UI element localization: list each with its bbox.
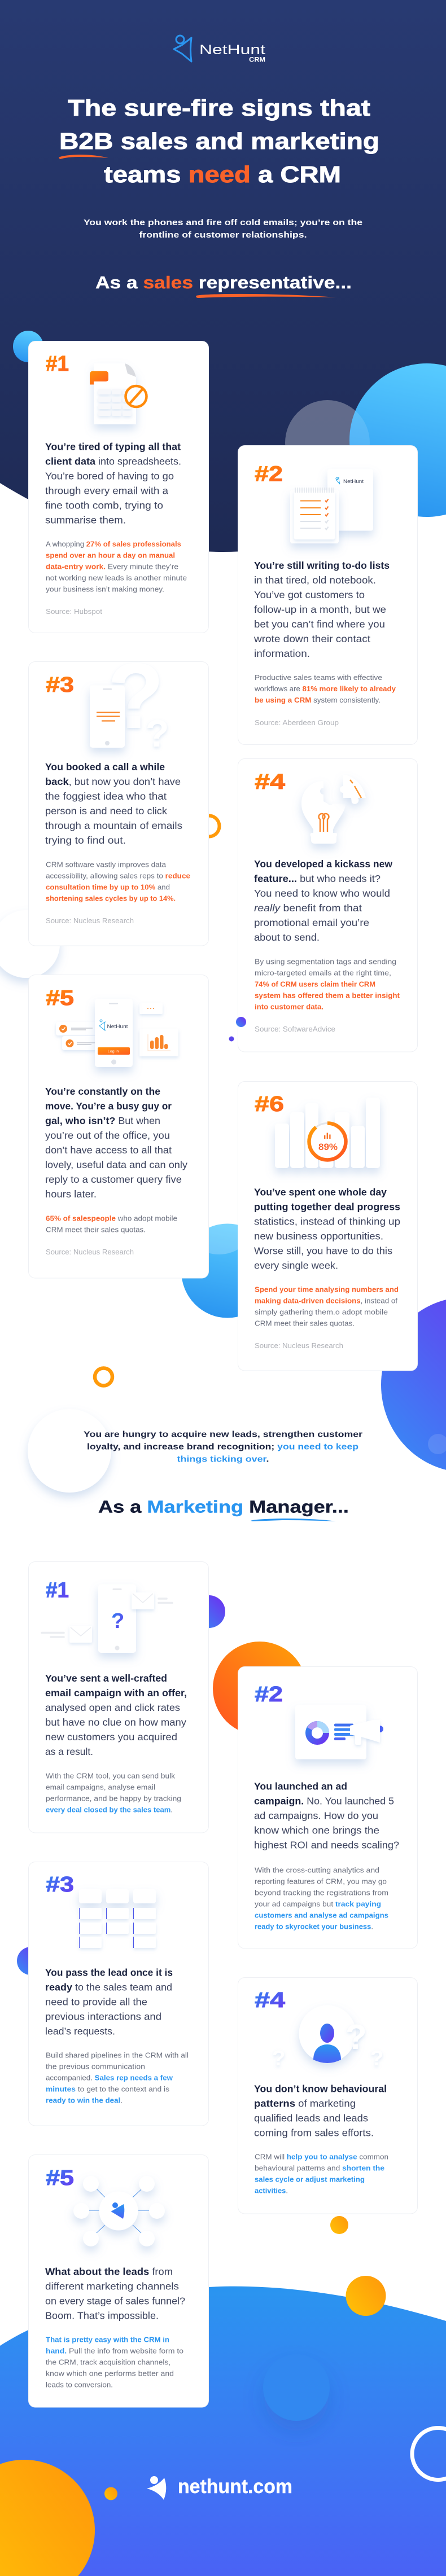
decoration: white shadow circle [0,910,60,978]
stat text: By using segmentation tags and sending [255,957,396,966]
card: sales sign 1 [28,341,209,633]
main text: You’ve sent a well-crafted [45,1673,167,1684]
decoration: sky blue blob top left [13,331,43,362]
source: Source: Hubspot [46,607,102,616]
main text: hours later. [45,1188,97,1200]
stat text: CRM meet their sales quotas. [46,1226,146,1234]
decoration: large sky blue blob right [349,363,446,517]
stat text: email campaigns, analyse email [46,1783,155,1791]
stat text: your business isn’t making money. [46,585,164,594]
icon: spreadsheet with prohibition sign [90,363,147,424]
decoration: purple half circle beside marketing card 1 [193,1595,225,1628]
subtitle [84,218,362,240]
main text: qualified leads and leads [254,2113,368,2124]
stat text: system has offered them a better insight [255,991,400,1000]
stat text: into customer data. [255,1002,323,1011]
main text: need to provide all the [45,1996,147,2008]
main text: every single week. [254,1260,338,1271]
logo: NetHunt CRM: NetHunt [199,42,265,58]
main text: move. You’re a busy guy or [45,1100,172,1112]
main text: don’t have access to all that [45,1144,172,1156]
stat text: CRM meet their sales quotas. [255,1319,355,1327]
number 1: #1 [46,1579,69,1603]
main text: as a result. [45,1746,93,1757]
main text: You’re constantly on the [45,1086,160,1097]
icon: person with question marks: ? [272,2047,285,2070]
decoration: small orange dot in footer [104,2487,117,2500]
main text: feature... but who needs it? [254,873,381,884]
main text: in that tired, old notebook. [254,574,376,586]
icon: phone with envelopes [42,1585,172,1653]
decoration: orange ring beside card 3 [199,816,219,836]
stat text [46,2335,183,2389]
source: Source: Aberdeen Group [255,718,339,727]
number 4: #4 [255,1989,285,2012]
main text [254,858,392,943]
main text: know which one brings the [254,1825,379,1836]
decoration: purple blob beside marketing card 3 [17,1947,45,1975]
decoration: translucent blob behind card 2 [285,400,370,486]
main text: person is and need to click [45,805,167,817]
stat text [46,860,190,903]
source: Source: Nucleus Research [255,1341,343,1350]
stat text: CRM will help you to analyse common [255,2152,388,2161]
main text: through every email with a [45,485,168,497]
stat text: consultation time by up to 10% and [46,883,170,892]
title: The sure-fire signs that [68,95,370,121]
stat text: leads to conversion. [46,2380,113,2389]
icon: person with question marks [272,2005,383,2070]
stat text [46,1214,177,1234]
decoration: orange ring [95,1368,112,1386]
main text: information. [254,648,310,659]
main text [45,1086,187,1200]
footer logo: nethunt.com [147,2476,292,2500]
card: marketing sign 2 [238,1667,418,1949]
main text [254,1186,400,1271]
intro text: marketing: You are hungry to acquire new leads, strengthen customer [84,1430,362,1439]
stat text [255,2152,388,2195]
stat text: data-entry work. Every minute they’re [46,562,178,571]
icon: phone with envelopes: ? [111,1609,124,1633]
source: Source: SoftwareAdvice [255,1025,335,1033]
main text: patterns of marketing [254,2098,356,2109]
stat text [46,2051,189,2105]
stat text: CRM software vastly improves data [46,860,167,869]
main text: What about the leads from [45,2266,173,2277]
main text: different marketing channels [45,2281,179,2292]
stat text: minutes to get to the context and is [46,2085,170,2094]
main text: You’ve got customers to [254,589,365,600]
main text: coming from sales efforts. [254,2127,374,2139]
stat text: be using a CRM system consistently. [255,696,381,704]
title [59,95,379,187]
stat text: reporting features of CRM, you may go [255,1877,387,1886]
main text: bet you can’t find where you [254,618,385,630]
number 3: #3 [46,1873,74,1897]
stat text: 74% of CRM users claim their CRM [255,980,375,989]
decoration: big orange circle bottom left [0,2460,95,2576]
main text: You pass the lead once it is [45,1967,173,1978]
stat text: simply gathering them.o adopt mobile [255,1308,388,1316]
main text: ready to the sales team and [45,1982,172,1993]
main text: you’re out of the office, you [45,1130,170,1141]
number 6: #6 [255,1092,284,1116]
decoration: faded blue circle in footer [263,2354,330,2421]
intro text: marketing: loyalty, and increase brand recognition; you need to keep [87,1442,358,1451]
main text: putting together deal progress [254,1201,400,1212]
number 5: #5 [46,986,74,1010]
stat text: the previous communication [46,2062,145,2071]
stat text: accessibility, allowing sales reps to reduce [46,871,190,880]
main text: gal, who isn’t? But when [45,1115,160,1126]
icon: bar chart with 89% ring [275,1098,380,1168]
main text: promotional email you’re [254,917,369,928]
stat text: behavioural patterns and shorten the [255,2164,384,2173]
decoration: white ring in footer [412,2428,446,2480]
main text: fine tooth comb, trying to [45,500,163,511]
logo: NetHunt CRM: CRM [249,56,265,63]
main text: analysed open and click rates [45,1702,180,1713]
stat text: beyond tracking the registrations from [255,1888,388,1897]
decoration: purple dot small [229,1036,234,1042]
heading: as a marketing manager: As a Marketing Manager... [98,1497,349,1517]
main text [45,2266,185,2322]
stat text: making data-driven decisions , instead of [255,1297,397,1305]
main text: statistics, instead of thinking up [254,1215,400,1227]
main text [253,560,390,659]
main text: wrote down their contact [253,633,370,644]
main text: previous interactions and [45,2011,161,2022]
stat text: not working new leads is another minute [46,573,187,582]
decoration: purple blob right [381,1297,446,1472]
decoration: yellow orange circle on wave [346,2276,386,2316]
main text: You need to know who would [254,888,390,899]
intro text: marketing: things ticking over . [177,1455,269,1464]
main text: client data into spreadsheets. [45,456,181,467]
card: marketing sign 5 [28,2154,209,2407]
main text: You launched an ad [254,1781,347,1792]
stat text: activities. [255,2186,288,2195]
stat text [46,1772,181,1814]
stat text: every deal closed by the sales team. [46,1806,173,1814]
stat text: Spend your time analysing numbers and [255,1285,399,1293]
source: Source: Nucleus Research [46,1248,134,1256]
stat text: ready to skyrocket your business. [255,1922,373,1931]
main text: highest ROI and needs scaling? [254,1840,399,1851]
main text: Worse still, you have to do this [254,1245,392,1256]
background: dark header panel [0,0,446,552]
background: footer blue wave [0,2287,446,2576]
icon: hub with satellites [73,2176,165,2246]
main text: You’re bored of having to go [45,471,174,482]
card: sales sign 5 [28,975,209,1278]
icon: analytics card with megaphone [295,1705,383,1759]
main text: the foggiest idea who that [45,791,167,802]
main text [45,441,181,526]
main text [45,1967,173,2037]
number 2: #2 [255,1683,283,1706]
main text: but have no clue on how many [45,1717,186,1728]
main text: campaign. No. You launched 5 [254,1796,394,1807]
main text: new customers you acquired [45,1731,177,1743]
stat text: ready to win the deal . [46,2096,123,2105]
stat text: performance, and be happy by tracking [46,1794,181,1802]
number 3: #3 [46,673,74,697]
stat text: customers and analyse ad campaigns [255,1911,388,1920]
main text: back, but now you don’t have [45,776,181,787]
main text: You’ve spent one whole day [254,1186,387,1197]
main text: reply to a customer query five [45,1174,182,1185]
main text: You’re still writing to-do lists [254,560,390,571]
main text: trying to find out. [45,835,126,846]
main text: through a mountain of emails [45,820,182,831]
main text: You don’t know behavioural [254,2083,387,2095]
stat text: A whopping 27% of sales professionals [46,539,181,548]
stat text [46,539,187,594]
main text: You booked a call a while [45,761,165,773]
stat text: micro-targeted emails at the right time, [255,968,391,977]
stat text [254,673,396,704]
main text: You developed a kickass new [254,858,392,870]
stat text: your ad campaigns but track paying [255,1899,381,1908]
main text: You’re tired of typing all that [45,441,181,453]
main text: summarise them. [45,515,126,526]
decoration: translucent overlap [285,400,370,486]
stat text: workflows are 81% more likely to already [254,684,396,693]
main text: email campaign with an offer, [45,1687,187,1699]
main text: about to send. [254,932,320,943]
decoration: white circle behind intro text [28,1409,111,1493]
stat text: With the CRM tool, you can send bulk [46,1772,176,1780]
icon: notebook checklist and NetHunt card [290,469,373,543]
stat text [255,1866,388,1931]
main text: ad campaigns. How do you [254,1810,378,1822]
number 2: #2 [255,463,283,486]
main text [45,1673,187,1757]
stat text: spend over an hour a day on manual [46,551,175,560]
card: marketing sign 4 [238,1977,418,2214]
icon: person with question marks: ? [346,2018,367,2057]
main text: follow-up in a month, but we [254,604,386,615]
main text [45,761,182,846]
footer logo: nethunt.com: nethunt.com [178,2476,292,2498]
logo: NetHunt CRM [174,36,265,63]
stat text: the CRM, track acquisition channels, [46,2358,170,2367]
main text: lovely, useful data and can only [45,1159,187,1170]
stat text: know which one performs better and [46,2369,174,2378]
icon: phone with question marks [90,644,169,755]
main text: Boom. That’s impossible. [45,2310,159,2322]
stat text: Build shared pipelines in the CRM with all [46,2051,189,2060]
subtitle: You work the phones and fire off cold emails; you’re on the [84,218,362,227]
main text [254,1781,399,1851]
card: sales sign 2 [238,446,418,745]
stat text: shortening sales cycles by up to 14%. [46,894,176,903]
title: teams need a CRM [104,161,341,187]
heading: as a sales representative: As a sales representative... [95,273,352,292]
stat text: That is pretty easy with the CRM in [46,2335,169,2344]
icon: notebook checklist and NetHunt card: NetHunt [343,479,364,484]
subtitle: frontline of customer relationships. [139,230,307,240]
icon: person with question marks: ? [370,2047,383,2070]
stat text: With the cross-cutting analytics and [255,1866,379,1875]
card: sales sign 3 [28,644,209,946]
number 4: #4 [255,770,285,794]
main text: on every stage of sales funnel? [45,2296,185,2307]
number 5: #5 [46,2166,74,2190]
number 1: #1 [46,352,69,376]
stat text: Productive sales teams with effective [255,673,382,682]
source: Source: Nucleus Research [46,916,134,925]
decoration: purple dot large [236,1017,246,1027]
decoration: blue blob between cards 5 and 6 [182,1223,238,1318]
decoration: yellow dot [330,2216,348,2234]
icon: light bulb with puzzle piece [301,775,366,844]
stat text: hand. Pull the info from website form to [46,2346,183,2355]
icon: bar chart with 89% ring: 89% [318,1142,338,1152]
stat text: 65% of salespeople who adopt mobile [46,1214,177,1222]
stat text [255,1285,399,1327]
icon: phone with question marks: ? [146,712,169,755]
stat text: sales cycle or adjust marketing [255,2175,365,2184]
card: sales sign 6 [238,1081,418,1371]
icon: phone with question marks: ? [107,644,164,748]
decoration: orange blob behind marketing card 2 [213,1642,307,1735]
main text: lead’s requests. [45,2026,115,2037]
main text: new business opportunities. [254,1230,383,1241]
card: marketing sign 3 [28,1862,209,2126]
icon: mobile CRM login with chart [56,999,178,1067]
card: marketing sign 1 [28,1562,209,1833]
card: sales sign 4 [238,758,418,1052]
icon: mobile CRM login with chart: NetHunt [107,1024,128,1029]
stat text: accompanied. Sales rep needs a few [46,2073,173,2082]
intro text: marketing [84,1430,362,1464]
stat text [255,957,400,1011]
icon: pipeline grid [79,1889,156,1948]
main text: really benefit from that [254,902,362,914]
icon: mobile CRM login with chart: Log in [107,1050,119,1054]
main text [254,2083,387,2139]
title: B2B sales and marketing [59,128,379,154]
